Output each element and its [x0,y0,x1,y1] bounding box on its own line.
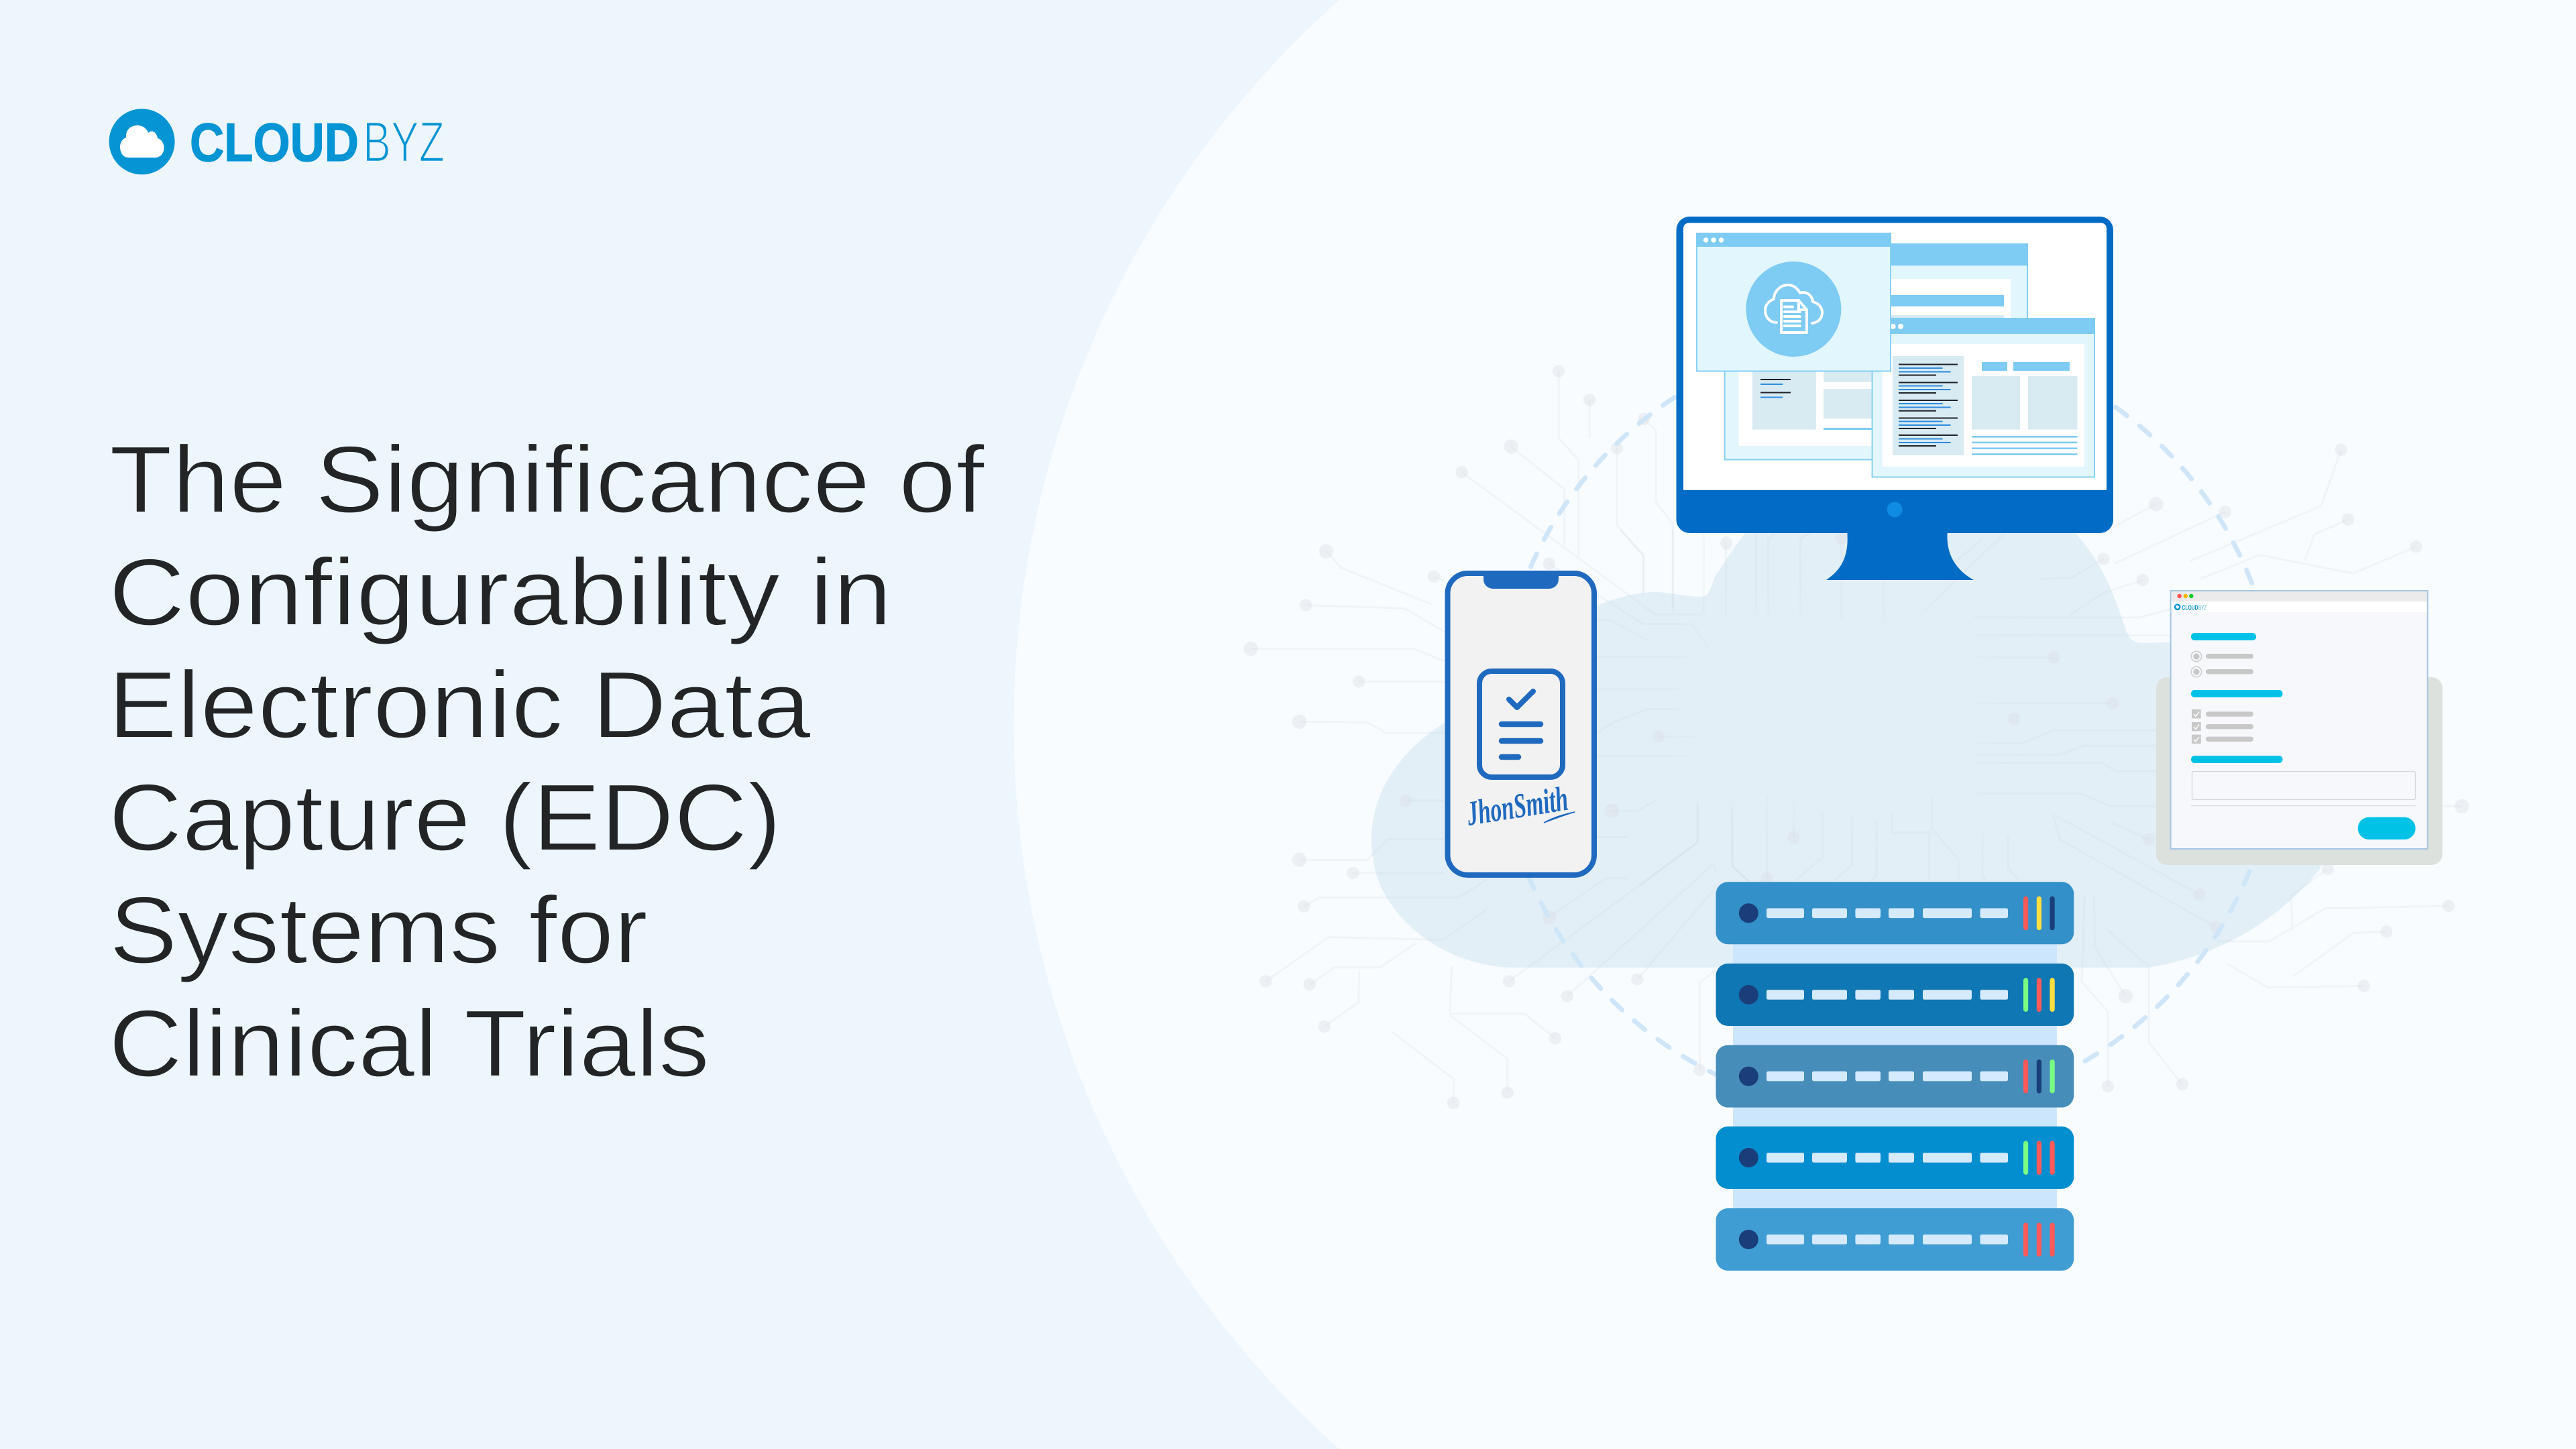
icon: cloud document [1765,285,1822,333]
signature [1463,780,1575,833]
phone body [1447,573,1594,875]
rack backing [1733,939,2057,1214]
server 3 [1716,1045,2074,1108]
browser bar [2172,591,2427,612]
cloud shape behind devices [1371,526,2333,968]
logo: Cloudbyz: BYZ [363,111,445,174]
title: Systems for [109,877,648,984]
server 1 [1716,882,2074,944]
icon: checklist document [1479,671,1563,777]
signature: JhonSmith [1463,780,1571,833]
power dot [1887,502,1902,518]
circuit network nodes [1243,365,2469,1109]
server stack [1716,882,2074,1271]
server 2 [1716,964,2074,1026]
form window with document list [1872,318,2095,477]
title: The Significance of [109,426,985,533]
mini logo: BYZ [2198,603,2206,612]
logo: Cloudbyz [109,109,445,174]
text area [2192,771,2416,799]
front window with cloud document icon [1696,233,1891,371]
radio options [2191,651,2253,677]
server 4 [1716,1126,2074,1189]
logo: Cloudbyz: CLOUD [190,113,359,173]
phone [1447,571,1594,875]
circuit network lines [1251,371,2462,1103]
title: Configurability in [109,539,892,646]
submit button [2358,817,2416,839]
title: Electronic Data [108,652,811,758]
form window [2171,591,2428,849]
server 5 [1716,1208,2074,1271]
phone notch [1483,571,1559,589]
title: Capture (EDC) [109,764,781,871]
form backing panel [2156,677,2443,865]
monitor screen [1683,223,2107,490]
checkbox options [2192,709,2253,744]
section heading bars [2191,633,2283,763]
web form [2156,591,2443,865]
back window [1724,243,2028,460]
title [108,426,985,1097]
monitor [1677,217,2113,580]
mini logo: CLOUD [2182,603,2198,612]
monitor stand [1826,530,1974,580]
dashed ring [1498,334,2278,1114]
monitor body [1677,217,2113,533]
title: Clinical Trials [109,990,710,1097]
background: large light circle [1013,0,2576,1449]
